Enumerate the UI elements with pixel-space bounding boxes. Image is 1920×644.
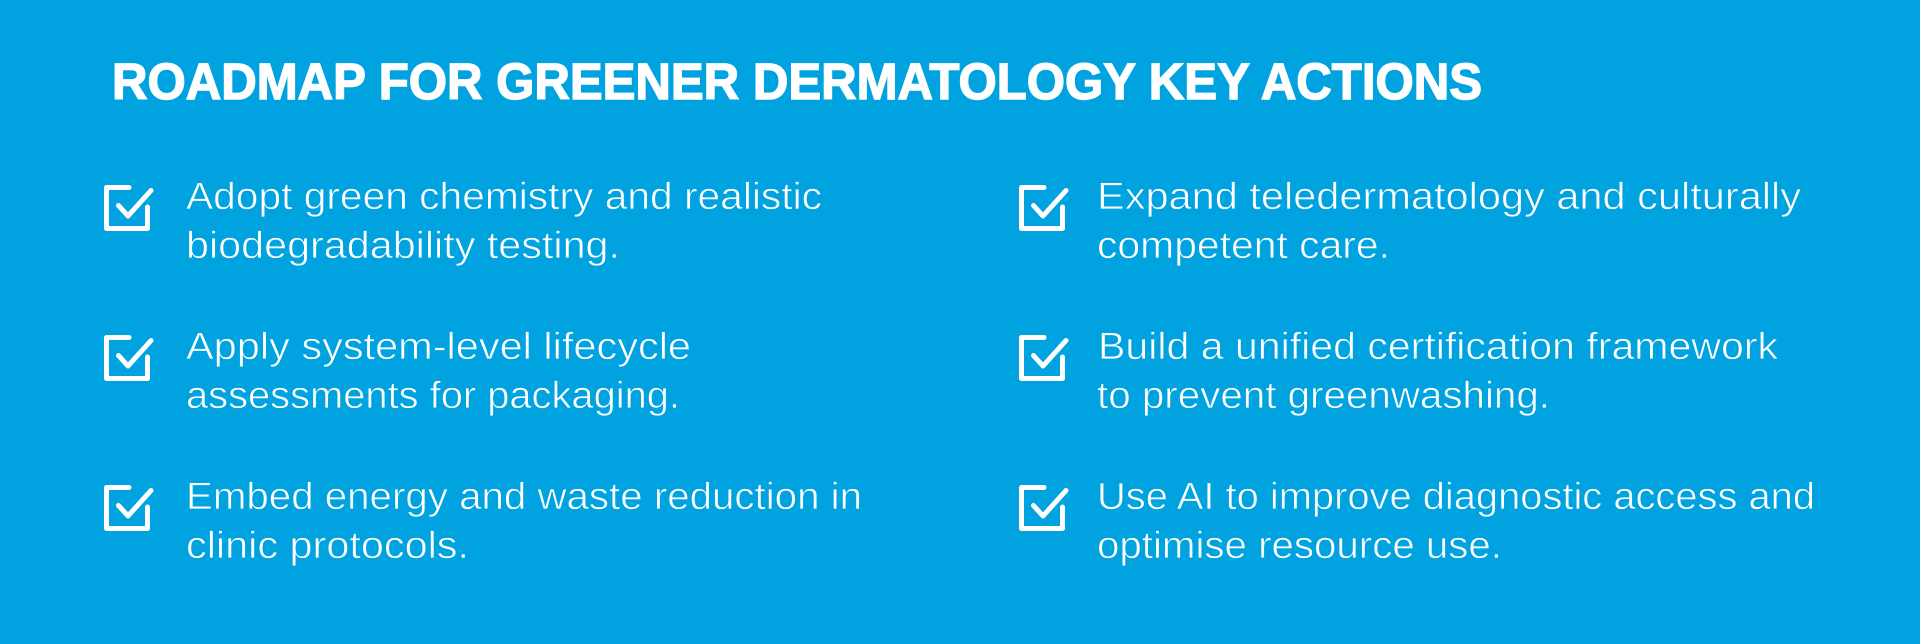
icon: checkbox [1022,338,1066,378]
text: AI diagnostics action: optimise resource use. [1097,525,1502,567]
text: teledermatology action: Expand teledermatology and culturally [1097,176,1801,218]
icon: checkbox [106,188,151,228]
icon: checkbox [1022,188,1066,228]
action item: certification framework [1022,326,1779,417]
icon: checkbox [106,488,151,528]
text: green chemistry action: biodegradability testing. [186,225,620,267]
panel: left column of actions [106,176,862,567]
action item: teledermatology [1022,176,1801,267]
action item: green chemistry [106,176,822,267]
action item: energy and waste [106,476,862,567]
icon: checkbox [106,338,151,378]
action item: lifecycle assessments [106,326,691,417]
title: ROADMAP FOR GREENER DERMATOLOGY KEY ACTIONS [112,53,1482,110]
text: certification framework action: Build a unified certification framework [1098,326,1779,368]
text: teledermatology action: competent care. [1097,225,1390,267]
panel: right column of actions [1022,176,1815,567]
text: energy and waste action: Embed energy and waste reduction in [186,476,862,518]
text: lifecycle assessments action: assessments for packaging. [186,375,680,417]
text: lifecycle assessments action: Apply system-level lifecycle [186,326,691,368]
text: energy and waste action: clinic protocols. [186,525,469,567]
icon: checkbox [1022,488,1066,528]
text: AI diagnostics action: Use AI to improve diagnostic access and [1097,476,1815,518]
text: certification framework action: to prevent greenwashing. [1097,375,1550,417]
text: green chemistry action: Adopt green chemistry and realistic [186,176,822,218]
action item: AI diagnostics [1022,476,1815,567]
